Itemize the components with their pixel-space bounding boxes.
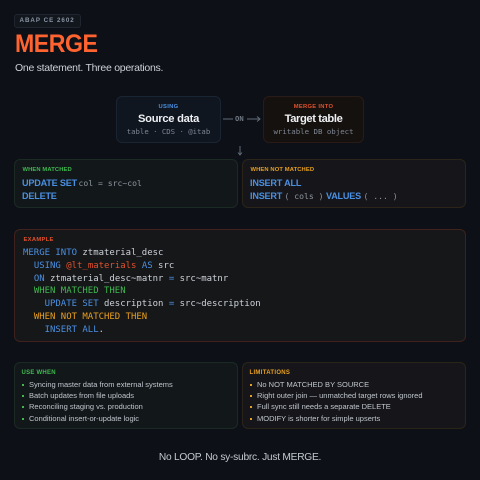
code: delete: DELETE [22, 191, 57, 201]
label: merge into: MERGE INTO [294, 104, 333, 110]
code block: ON ztmaterial_desc~matnr = src~matnr [34, 274, 228, 284]
code block [23, 248, 261, 334]
code block: WHEN NOT MATCHED THEN [34, 312, 147, 322]
list: use cases: Syncing master data from external systems [29, 380, 173, 389]
code block: INSERT ALL. [45, 324, 104, 334]
code: insert values: INSERT [250, 191, 282, 201]
panel: example [14, 229, 466, 342]
arrow: on [223, 114, 261, 123]
list: limitations [250, 380, 423, 423]
code: insert values: ( ... ) [364, 191, 398, 201]
label: using: USING [158, 104, 179, 110]
text: source types: table · CDS · @itab [127, 126, 210, 136]
panel: limitations [242, 362, 466, 429]
heading: source data: Source data [138, 113, 199, 125]
version badge [14, 14, 81, 28]
subtitle: One statement. Three operations. [15, 62, 163, 74]
code: update set: col = src~col [78, 178, 142, 188]
label: when not matched: WHEN NOT MATCHED [250, 167, 314, 173]
list: limitations: Right outer join — unmatched target rows ignored [257, 391, 423, 400]
code block: WHEN MATCHED THEN [34, 286, 126, 296]
code: update set [22, 178, 142, 188]
list: use cases: Conditional insert-or-update logic [29, 414, 139, 423]
code: insert values [250, 191, 398, 201]
title: MERGE [14, 30, 97, 58]
panel: target table [263, 96, 364, 143]
panel: when matched [14, 159, 238, 208]
code block: UPDATE SET description = src~description [45, 299, 261, 309]
panel: source data [116, 96, 221, 143]
version badge: ABAP CE 2602 [20, 17, 75, 24]
list: use cases: Reconciling staging vs. production [29, 402, 143, 411]
code: insert values: ( cols ) [284, 191, 323, 201]
list: limitations: MODIFY is shorter for simple upserts [257, 414, 380, 423]
footer tagline: No LOOP. No sy-subrc. Just MERGE. [159, 452, 321, 462]
list: use cases [22, 380, 173, 423]
panel: use when [14, 362, 238, 429]
code: insert all: INSERT ALL [250, 178, 301, 188]
label: when matched: WHEN MATCHED [22, 167, 72, 173]
panel: when not matched [242, 159, 466, 208]
code: insert values: VALUES [326, 191, 361, 201]
arrow: on: ON [235, 114, 244, 123]
heading: target table: Target table [285, 113, 342, 125]
label: limitations: LIMITATIONS [250, 370, 290, 376]
code block: USING @lt_materials AS src [34, 261, 174, 271]
code block: MERGE INTO ztmaterial_desc [23, 248, 163, 258]
arrow: down [238, 146, 242, 156]
list: limitations: Full sync still needs a separate DELETE [257, 402, 391, 411]
label: use when: USE WHEN [22, 370, 56, 376]
list: use cases: Batch updates from file uploads [29, 391, 134, 400]
label: example: EXAMPLE [24, 237, 54, 243]
code: update set: UPDATE SET [22, 178, 77, 188]
list: limitations: No NOT MATCHED BY SOURCE [257, 380, 369, 389]
text: target description: writable DB object [273, 126, 354, 136]
